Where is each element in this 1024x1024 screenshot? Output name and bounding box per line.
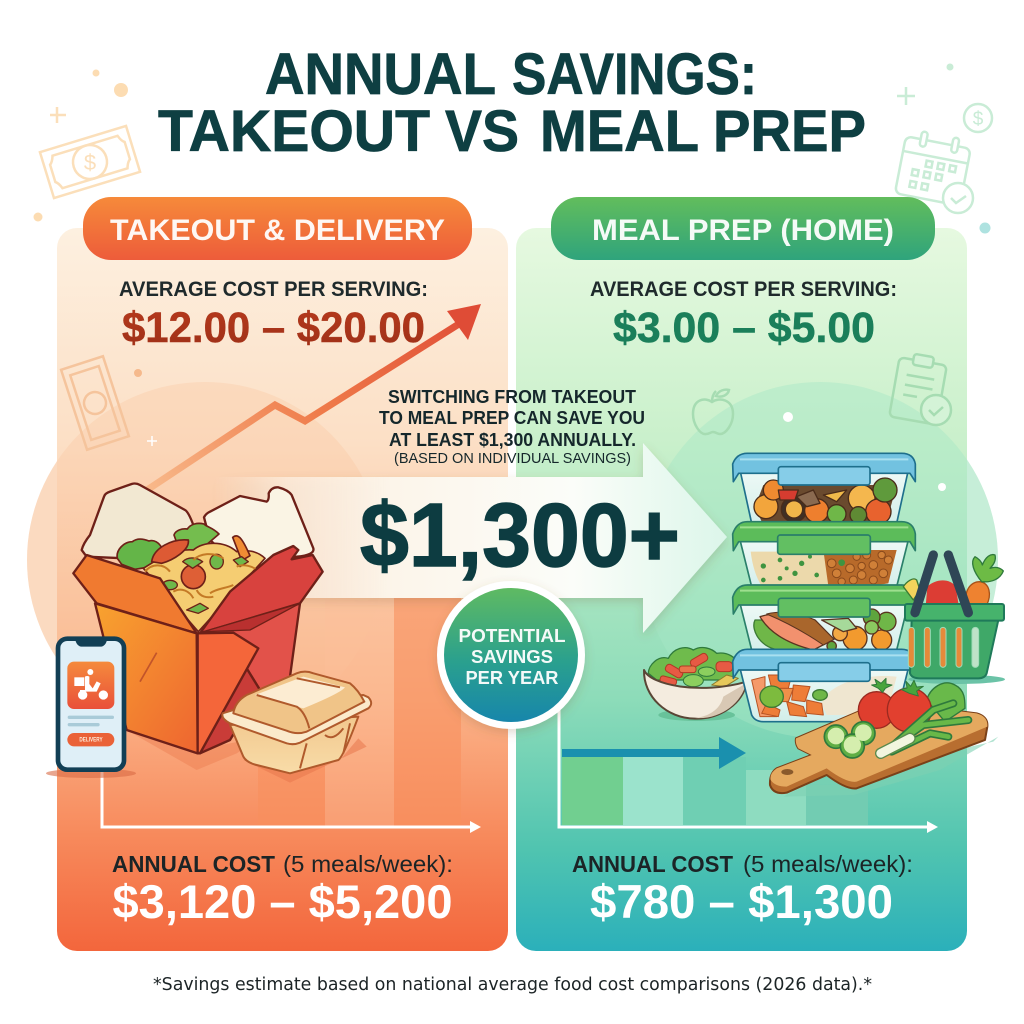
title: SAVINGS: [512,42,757,107]
panel: meal prep at home [516,228,998,951]
icon: dollar bill top left: $ [84,150,96,175]
title: MEAL [540,99,699,164]
illustration: delivery app phone: DELIVERY [79,737,103,744]
annual cost: meal prep: (5 meals/week): [743,851,913,877]
badge: potential savings per year: SAVINGS [471,647,553,667]
savings message: SWITCHING FROM TAKEOUT [388,387,636,407]
decorative marks top left [34,70,128,222]
container 4 blue [733,649,915,722]
badge: potential savings per year: PER YEAR [466,668,558,688]
title [158,42,866,164]
savings message [379,387,645,467]
icon: dollar bill on panel [61,356,129,450]
cost per serving: takeout: AVERAGE COST PER SERVING: [119,278,428,301]
background circle: takeout side [27,382,383,738]
icon: dollar bill top left [40,126,140,198]
badge: potential savings per year: POTENTIAL [458,626,566,646]
savings amount: $1,300+ [360,486,680,586]
cost per serving: takeout [119,278,428,352]
annual cost: takeout: $3,120 – $5,200 [112,875,453,928]
decorative marks top right [897,64,990,234]
container 2 green [733,522,915,592]
icon: dollar coin top right [964,104,992,132]
illustration: grocery basket [903,555,1005,684]
salad bowl [644,648,747,721]
box lower fold [200,668,260,753]
icon: dollar coin top right: $ [973,109,984,130]
cost per serving: takeout: $12.00 – $20.00 [122,304,425,352]
bar chart: takeout [102,597,481,833]
annual cost: meal prep [572,851,913,928]
scooter icon [74,669,108,700]
header pill: meal prep home: MEAL PREP (HOME) [592,214,894,247]
bar chart: meal prep [559,700,938,833]
savings message: AT LEAST $1,300 ANNUALLY. [389,430,636,450]
food [117,523,265,632]
cost per serving: meal prep [590,278,897,352]
illustration: stacked meal prep containers [644,453,915,722]
illustration: delivery app phone [46,638,136,778]
panel sparkle right [783,412,946,491]
illustration: clamshell container [222,672,371,783]
title: PREP [713,99,866,164]
box right back face [200,603,300,690]
box front left face [95,603,198,753]
box back flaps [82,484,193,560]
illustration: cutting board with vegetables [770,678,998,797]
header pill: takeout and delivery [83,197,472,260]
big savings arrow [215,443,727,633]
annual cost: takeout: ANNUAL COST [112,851,275,877]
annual cost: meal prep: $780 – $1,300 [590,875,893,928]
badge: potential savings per year [437,581,585,729]
footnote: *Savings estimate based on national average food cost comparisons (2026 data).* [153,975,872,995]
savings message: (BASED ON INDIVIDUAL SAVINGS) [394,451,631,467]
annual cost: takeout [112,851,453,928]
container 3 green [733,585,915,655]
box right flap [200,546,323,633]
cost per serving: meal prep: $3.00 – $5.00 [613,304,875,352]
title: VS [445,99,519,164]
savings message: TO MEAL PREP CAN SAVE YOU [379,408,645,428]
cost per serving: meal prep: AVERAGE COST PER SERVING: [590,278,897,301]
header pill: meal prep home [551,197,935,260]
icon: calendar with check top right [895,128,973,213]
icon: apple [693,390,733,434]
panel sparkles left [134,369,157,446]
box left flap [73,555,197,633]
rising cost arrow [147,304,481,490]
container 1 blue [733,453,915,528]
illustration: takeout box [73,484,323,770]
annual cost: takeout: (5 meals/week): [283,851,453,877]
icon: clipboard [889,351,948,425]
icon: check badge [921,395,951,425]
title: ANNUAL [265,42,496,107]
background circle: meal prep side [642,382,998,738]
title: TAKEOUT [158,99,430,164]
header pill: takeout and delivery: TAKEOUT & DELIVERY [110,214,445,247]
panel: takeout and delivery [27,228,508,951]
annual cost: meal prep: ANNUAL COST [572,851,733,877]
box front right face [198,633,258,753]
